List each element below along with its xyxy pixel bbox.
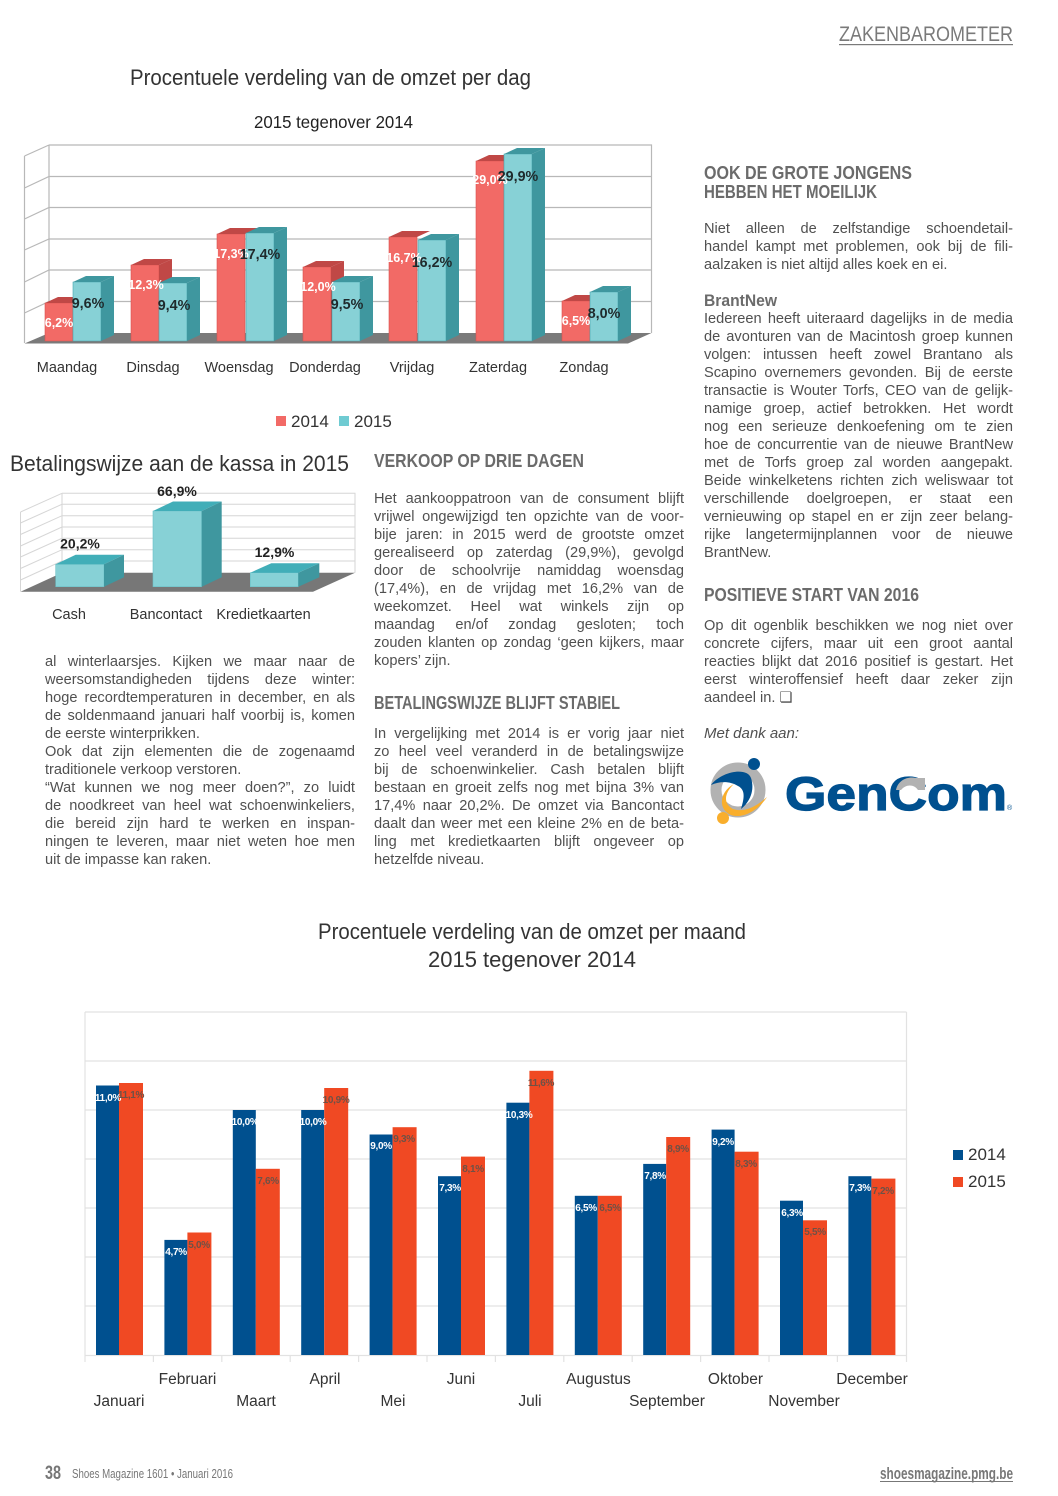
text block: betalingswijze blijft stabiel: 17,4% naar 20,2%. De omzet via Bancontact: [374, 798, 684, 814]
text block: positieve start: aandeel in. ❏: [704, 690, 793, 706]
footer: page number and magazine: 38: [45, 1463, 61, 1484]
text block: BrantNew: vernieuwing op stapel en er zijn zeer belang-: [704, 509, 1013, 525]
value labels 2015: 8,1%: [462, 1164, 484, 1175]
day labels: Maandag: [37, 360, 97, 376]
data labels 2015: 9,4%: [158, 298, 191, 314]
text block: verkoop op drie dagen: weekomzet. Heel wat winkels zijn op: [374, 599, 684, 615]
data labels 2015: 29,9%: [498, 169, 539, 185]
month labels: April: [309, 1371, 341, 1388]
heading: ook de grote jongens: HEBBEN HET MOEILIJK: [704, 182, 877, 202]
text block: winterlaarsjes: al winterlaarsjes. Kijken we maar naar de: [45, 654, 355, 670]
text block: BrantNew: Iedereen heeft uiteraard dagelijks in de media: [704, 311, 1013, 327]
month labels: November: [768, 1393, 840, 1410]
text block: verkoop op drie dagen: [374, 491, 684, 669]
text block: winterlaarsjes: de soldenmaand januari half voorbij is, komen: [45, 708, 355, 724]
logo wordmark: GenCom: [785, 767, 1007, 820]
month labels: Maart: [236, 1393, 277, 1410]
text block: verkoop op drie dagen: Het aankooppatroon van de consument blijft: [374, 491, 684, 507]
text block: BrantNew: volgen: intussen heeft zowel Brantano als: [704, 347, 1013, 363]
text block: winterlaarsjes: Ook dat zijn elementen die de zogenaamd: [45, 744, 355, 760]
title: omzet per dag: Procentuele verdeling van de omzet per dag: [130, 65, 531, 90]
day labels: Zaterdag: [469, 360, 527, 376]
text block: winterlaarsjes: de eerste winterprikken.: [45, 726, 200, 742]
text block: positieve start: reacties blijkt dat 2016 positief is gestart. Het: [704, 654, 1013, 670]
value labels: 66,9%: [157, 483, 197, 499]
bars 2014 and 2015: [45, 148, 631, 341]
day labels: Woensdag: [204, 360, 274, 376]
subtitle: 2015 tegenover 2014: 2015 tegenover 2014: [254, 112, 413, 132]
value labels: 20,2%: [60, 536, 100, 552]
chart floor: [24, 333, 652, 344]
text block: winterlaarsjes: die bereid zijn hard te werken en inspan-: [45, 816, 355, 832]
text block: BrantNew: nog een serieuze denkoefening om te zien: [704, 419, 1013, 435]
text block: positieve start: [704, 618, 1013, 706]
data labels 2015: 9,6%: [72, 296, 105, 312]
text block: betalingswijze blijft stabiel: hetzelfde niveau.: [374, 852, 484, 868]
value labels 2014: 7,3%: [849, 1183, 871, 1194]
footer: page number and magazine: [45, 1463, 233, 1484]
text block: BrantNew: transactie is Wouter Torfs, CEO van de gelijk-: [704, 383, 1013, 399]
text block: positieve start: concrete cijfers, maar uit een groot aantal: [704, 636, 1013, 652]
footer: page number and magazine: Shoes Magazine 1601 • Januari 2016: [72, 1466, 233, 1481]
subheading: BrantNew: BrantNew: [704, 291, 778, 310]
legend: omzet per dag: 2015: [354, 412, 392, 431]
day labels: [37, 360, 609, 376]
legend: omzet per maand: 2015: [968, 1172, 1006, 1191]
text block: ook de grote jongens: [704, 221, 1013, 273]
value labels 2015: 11,6%: [528, 1078, 555, 1089]
text block: winterlaarsjes: [45, 654, 355, 868]
value labels 2014: 6,5%: [575, 1203, 597, 1214]
value labels 2014: 10,3%: [506, 1110, 533, 1121]
value labels 2014: 10,0%: [300, 1117, 327, 1128]
value labels 2014: 4,7%: [165, 1247, 187, 1258]
title: betalingswijze: Betalingswijze aan de kassa in 2015: [10, 451, 349, 476]
text block: betalingswijze blijft stabiel: [374, 726, 684, 868]
value labels 2014: 7,8%: [644, 1171, 666, 1182]
data labels 2014: 12,0%: [300, 280, 336, 294]
legend: omzet per maand: 2014: [968, 1145, 1006, 1164]
text block: winterlaarsjes: ningen te leveren, maar niet weten hoe men: [45, 834, 355, 850]
text block: winterlaarsjes: weersomstandigheden tijdens deze winter:: [45, 672, 355, 688]
text block: betalingswijze blijft stabiel: ling met kredietkaarten blijft ongeveer op: [374, 834, 684, 850]
month labels: Juli: [518, 1393, 542, 1410]
bar: Kredietkaarten: [250, 563, 319, 587]
text block: ook de grote jongens: Niet alleen de zelfstandige schoendetail-: [704, 221, 1013, 237]
month labels: Augustus: [566, 1371, 631, 1388]
data labels 2015: 8,0%: [588, 306, 621, 322]
value labels 2015: 8,3%: [735, 1159, 757, 1170]
value labels 2014: 11,0%: [95, 1093, 122, 1104]
value labels 2015: 10,9%: [323, 1095, 350, 1106]
text block: betalingswijze blijft stabiel: daalt dan weer met een kleine 2% en de beta-: [374, 816, 684, 832]
value labels 2014: 9,2%: [712, 1137, 734, 1148]
text block: betalingswijze blijft stabiel: zo heel veel veranderd in de betalingswijze: [374, 744, 684, 760]
value labels 2015: 11,1%: [118, 1090, 145, 1101]
month labels: Juni: [447, 1371, 475, 1388]
text block: BrantNew: [704, 311, 1013, 561]
value labels 2015: 7,2%: [872, 1186, 894, 1197]
heading: ook de grote jongens: OOK DE GROTE JONGENS: [704, 163, 912, 183]
text block: verkoop op drie dagen: (17,4%), en de vrijdag met 16,2% van de: [374, 581, 684, 597]
data labels 2014: 16,7%: [386, 251, 422, 265]
value labels: [60, 483, 295, 560]
section label: Zakenbarometer: ZAKENBAROMETER: [839, 23, 1013, 46]
day labels: Zondag: [559, 360, 609, 376]
value labels 2015: [118, 1078, 894, 1251]
heading: verkoop op drie dagen: VERKOOP OP DRIE DAGEN: [374, 451, 584, 471]
bars 2015: [119, 1071, 895, 1355]
value labels 2015: 5,5%: [804, 1227, 826, 1238]
text block: verkoop op drie dagen: vrijwel ongewijzigd ten opzichte van de voor-: [374, 509, 684, 525]
title: omzet per maand: Procentuele verdeling van de omzet per maand: [318, 919, 746, 944]
text block: winterlaarsjes: uit de impasse kan raken.: [45, 852, 211, 868]
text block: BrantNew: BrantNew.: [704, 545, 771, 561]
text block: BrantNew: rijke langetermijnplannen voor de nieuwe: [704, 527, 1013, 543]
3D bar chart: omzet per dag: [24, 145, 652, 376]
heading: positieve start: POSITIEVE START VAN 2016: [704, 585, 919, 605]
legend: omzet per maand: [953, 1145, 1006, 1191]
data labels 2015: 9,5%: [331, 297, 364, 313]
logo emblem: [711, 758, 767, 824]
logo wordmark: ®: [1007, 804, 1013, 812]
value labels: 12,9%: [255, 544, 295, 560]
text block: BrantNew: Scapino overnemers gevonden. Bij de eerste: [704, 365, 1013, 381]
data labels 2014: 17,3%: [213, 247, 249, 261]
text block: ook de grote jongens: handel kampt met problemen, ook bij de fili-: [704, 239, 1013, 255]
title: omzet per maand: [318, 919, 746, 972]
data labels 2014: 6,2%: [45, 316, 73, 330]
data labels 2015: [72, 169, 621, 322]
value labels 2014: 10,0%: [232, 1117, 259, 1128]
text block: betalingswijze blijft stabiel: bestaan en groeit zelfs nog met bijna 3% van: [374, 780, 684, 796]
month labels: Januari: [94, 1393, 144, 1410]
text block: verkoop op drie dagen: maandag en/of zondag gesloten; toch: [374, 617, 684, 633]
data labels 2014: [45, 173, 590, 330]
text block: verkoop op drie dagen: gerealiseerd op zaterdag (29,9%), gevolgd: [374, 545, 684, 561]
text block: BrantNew: namige groep, actief betrokken. Het wordt: [704, 401, 1013, 417]
text block: BrantNew: de avonturen van de Macintosh groep kunnen: [704, 329, 1013, 345]
month labels: September: [629, 1393, 705, 1410]
bars 2014: [96, 1086, 871, 1355]
value labels 2014: 9,0%: [370, 1141, 392, 1152]
value labels 2014: 7,3%: [439, 1183, 461, 1194]
value labels 2015: 5,0%: [188, 1240, 210, 1251]
value labels 2014: [95, 1093, 871, 1258]
text block: BrantNew: verschillende doelgroepen, er staat een: [704, 491, 1013, 507]
title: omzet per maand: 2015 tegenover 2014: [428, 947, 636, 972]
heading: ook de grote jongens: [704, 163, 912, 202]
text block: betalingswijze blijft stabiel: In vergelijking met 2014 is er vorig jaar niet: [374, 726, 684, 742]
category labels: [52, 607, 311, 623]
category labels: Bancontact: [130, 607, 202, 623]
text block: verkoop op drie dagen: bije jaren: in 2015 werd de grootste omzet: [374, 527, 684, 543]
text block: betalingswijze blijft stabiel: bij de schoenwinkelier. Cash betalen blijft: [374, 762, 684, 778]
value labels 2015: 7,6%: [257, 1176, 279, 1187]
text block: positieve start: Op dit ogenblik beschikken we nog niet over: [704, 618, 1013, 634]
bar: Cash: [56, 555, 124, 587]
value labels 2015: 6,5%: [599, 1203, 621, 1214]
text block: verkoop op drie dagen: kopers’ zijn.: [374, 653, 451, 669]
month labels: December: [836, 1371, 908, 1388]
category labels: Kredietkaarten: [216, 607, 311, 623]
logo: GenCom: [711, 758, 1013, 824]
text block: ook de grote jongens: aalzaken is niet altijd alles koek en ei.: [704, 257, 947, 273]
data labels 2014: 12,3%: [128, 278, 164, 292]
day labels: Vrijdag: [390, 360, 434, 376]
thanks line: Met dank aan:: [704, 725, 799, 742]
bar: Bancontact: [153, 502, 222, 587]
day labels: Donderdag: [289, 360, 361, 376]
month labels: Mei: [381, 1393, 405, 1410]
data labels 2014: 6,5%: [562, 314, 590, 328]
text block: verkoop op drie dagen: door de schoolvrije namiddag woensdag: [374, 563, 684, 579]
legend: omzet per dag: [276, 412, 392, 431]
legend: omzet per dag: 2014: [291, 412, 329, 431]
text block: BrantNew: hoe de concurrentie van de nieuwe BrantNew: [704, 437, 1013, 453]
chart floor: [20, 573, 355, 592]
data labels 2015: 17,4%: [240, 247, 281, 263]
heading: betalingswijze blijft stabiel: BETALINGSWIJZE BLIJFT STABIEL: [374, 693, 620, 713]
3D bar chart: betalingswijze: [20, 483, 355, 623]
text block: BrantNew: met de Torfs groep zal worden aangepakt.: [704, 455, 1013, 471]
text block: verkoop op drie dagen: zouden klanten op zondag ‘geen kijkers, maar: [374, 635, 684, 651]
month labels: Oktober: [708, 1371, 763, 1388]
text block: positieve start: eerst winteroffensief heeft daar zeker zijn: [704, 672, 1013, 688]
text block: winterlaarsjes: de noodkreet van heel wat schoenwinkeliers,: [45, 798, 355, 814]
text block: winterlaarsjes: “Wat kunnen we nog meer doen?”, zo luidt: [45, 780, 355, 796]
day labels: Dinsdag: [126, 360, 180, 376]
text block: winterlaarsjes: traditionele verkoop verstoren.: [45, 762, 241, 778]
value labels 2014: 6,3%: [781, 1208, 803, 1219]
text block: winterlaarsjes: hoge recordtemperaturen in december, en als: [45, 690, 355, 706]
value labels 2015: 9,3%: [393, 1134, 415, 1145]
text block: BrantNew: Beide winkelketens richten zich weliswaar tot: [704, 473, 1013, 489]
month labels: [94, 1371, 908, 1410]
value labels 2015: 8,9%: [667, 1144, 689, 1155]
month labels: Februari: [159, 1371, 216, 1388]
category labels: Cash: [52, 607, 86, 623]
bar chart: omzet per maand: [85, 1012, 908, 1410]
data labels 2014: 29,0%: [472, 173, 508, 187]
data labels 2015: 16,2%: [412, 255, 453, 271]
